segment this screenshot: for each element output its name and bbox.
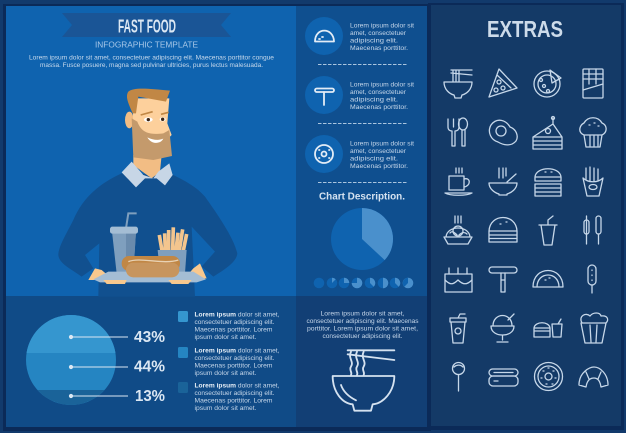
extras heading: EXTRAS: [487, 16, 563, 42]
legend item 3: Lorem ipsum dolor sit amet,: [194, 382, 280, 390]
icon: donut: [534, 362, 562, 390]
cup: [112, 232, 136, 273]
panel: pie statistics: [6, 296, 296, 427]
text: Lorem ipsum dolor sit: [350, 82, 414, 88]
intro text: massa. Fusce posuere, magna sed pulvinar ultricies, purus lectus malesuada.: [40, 62, 263, 69]
icon: donut: [305, 135, 343, 173]
text: amet, consectetuer: [350, 89, 407, 96]
text: adipiscing elit.: [350, 38, 398, 44]
icon: noodle bowl: [333, 350, 394, 411]
smile: [147, 137, 163, 143]
small pie charts: [314, 278, 413, 288]
icon: noodle bowl: [444, 70, 472, 98]
icon: hot dog: [489, 369, 518, 386]
legend item 2: Lorem ipsum dolor sit amet,: [194, 348, 280, 354]
text: Lorem ipsum dolor sit: [350, 140, 414, 148]
icon: coffee cup: [445, 168, 472, 195]
legend item 2: ipsum dolor sit amet.: [194, 370, 257, 377]
icon grid: [444, 69, 608, 391]
text: amet, consectetuer: [350, 148, 407, 155]
bowl description text: porttitor. Lorem ipsum dolor sit amet,: [307, 326, 418, 332]
hair: [127, 89, 170, 113]
straw: [126, 213, 137, 228]
legend item 2: consectetuer adipiscing elit.: [194, 355, 275, 362]
step 2: [305, 76, 414, 114]
pie chart: [331, 208, 393, 270]
icon: takeaway cup: [450, 314, 466, 343]
panel: steps and chart: [296, 6, 427, 296]
large pie with percentages: [26, 315, 165, 405]
text: adipiscing elit.: [350, 96, 398, 104]
fries: [159, 227, 187, 251]
title banner: [62, 13, 231, 37]
icon: soup bowl: [489, 168, 517, 195]
fries box: [158, 250, 187, 273]
icon: popcorn: [581, 313, 608, 343]
legend item 1: consectetuer adipiscing elit.: [194, 319, 275, 326]
illustration: man holding tray: [58, 89, 237, 297]
panel: bowl description: [296, 296, 427, 427]
bowl description text: consectetuer adipiscing elit. Maecenas: [306, 318, 419, 325]
icon: fork and spoon: [448, 118, 468, 146]
icon: taco: [533, 270, 563, 287]
intro text: [29, 54, 274, 69]
icon: noodle plate: [444, 216, 472, 244]
fingers: [103, 280, 192, 284]
icon: croissant: [579, 367, 608, 387]
icon: taco: [305, 17, 343, 55]
panel: hero: [6, 6, 296, 296]
legend item 2: [178, 347, 280, 377]
icon: drink cup: [539, 216, 557, 245]
legend item 1: Lorem ipsum dolor sit amet,: [194, 312, 280, 318]
text: [350, 140, 414, 170]
step 3: [305, 135, 414, 173]
icon: fried egg: [489, 120, 517, 145]
percentages: 43%: [134, 329, 165, 346]
legend item 1: Maecenas porttitor. Lorem: [194, 326, 272, 334]
text: [350, 82, 414, 111]
legend item 3: ipsum dolor sit amet.: [194, 405, 257, 412]
bowl description text: Lorem ipsum dolor sit amet,: [320, 310, 405, 318]
icon: sausage on fork: [305, 76, 343, 114]
leader lines: [69, 335, 128, 398]
icon: lollipop: [452, 362, 464, 391]
neck: [133, 155, 162, 178]
icon: cake slice: [533, 116, 562, 149]
chart heading: Chart Description.: [319, 192, 405, 202]
legend item 2: Maecenas porttitor. Lorem: [194, 362, 272, 370]
face: [133, 98, 172, 140]
tray: [93, 272, 206, 282]
text: Maecenas porttitor.: [350, 163, 408, 170]
icon: birthday cake: [445, 268, 472, 292]
text: [350, 22, 414, 52]
icon: chocolate: [583, 69, 603, 98]
legend item 3: Maecenas porttitor. Lorem: [194, 398, 272, 404]
icon: corn dog: [588, 265, 596, 293]
text: amet, consectetuer: [350, 30, 407, 37]
text: Maecenas porttitor.: [350, 104, 408, 111]
ear: [125, 112, 134, 128]
icon: fries: [583, 167, 603, 196]
percentages: [134, 329, 165, 405]
icon: muffin: [580, 118, 606, 147]
text: Lorem ipsum dolor sit: [350, 22, 414, 30]
subtitle: INFOGRAPHIC TEMPLATE: [95, 41, 198, 50]
step 1: [305, 17, 414, 55]
title: FAST FOOD: [118, 15, 176, 36]
sweater: [58, 173, 237, 297]
legend item 3: consectetuer adipiscing elit.: [194, 390, 275, 397]
icon: ice cream: [491, 314, 514, 342]
brows and eyes: [141, 112, 169, 122]
bowl description text: [306, 310, 419, 340]
percentages: 44%: [134, 358, 165, 376]
icon: sausage on fork: [489, 267, 517, 292]
collar: [122, 162, 173, 187]
icon: burger and drink: [534, 319, 562, 337]
icon: pizza slice: [489, 69, 517, 97]
icon: burger: [535, 169, 561, 196]
bowl description text: consectetuer adipiscing elit.: [322, 333, 403, 340]
icon: pizza: [534, 70, 561, 97]
icon: hamburger: [489, 218, 517, 242]
hands: [88, 263, 207, 280]
hot dog: [122, 256, 180, 277]
icon: corn dogs: [584, 216, 601, 244]
legend item 1: ipsum dolor sit amet.: [194, 334, 257, 341]
panel: extras: [431, 5, 621, 426]
legend item 1: [178, 311, 280, 341]
percentages: 13%: [135, 388, 165, 405]
text: adipiscing elit.: [350, 156, 398, 162]
beard: [132, 118, 172, 160]
intro text: Lorem ipsum dolor sit amet, consectetuer adipiscing elit. Maecenas porttitor congue: [29, 54, 274, 62]
legend item 3: [178, 382, 280, 412]
text: Maecenas porttitor.: [350, 45, 408, 52]
